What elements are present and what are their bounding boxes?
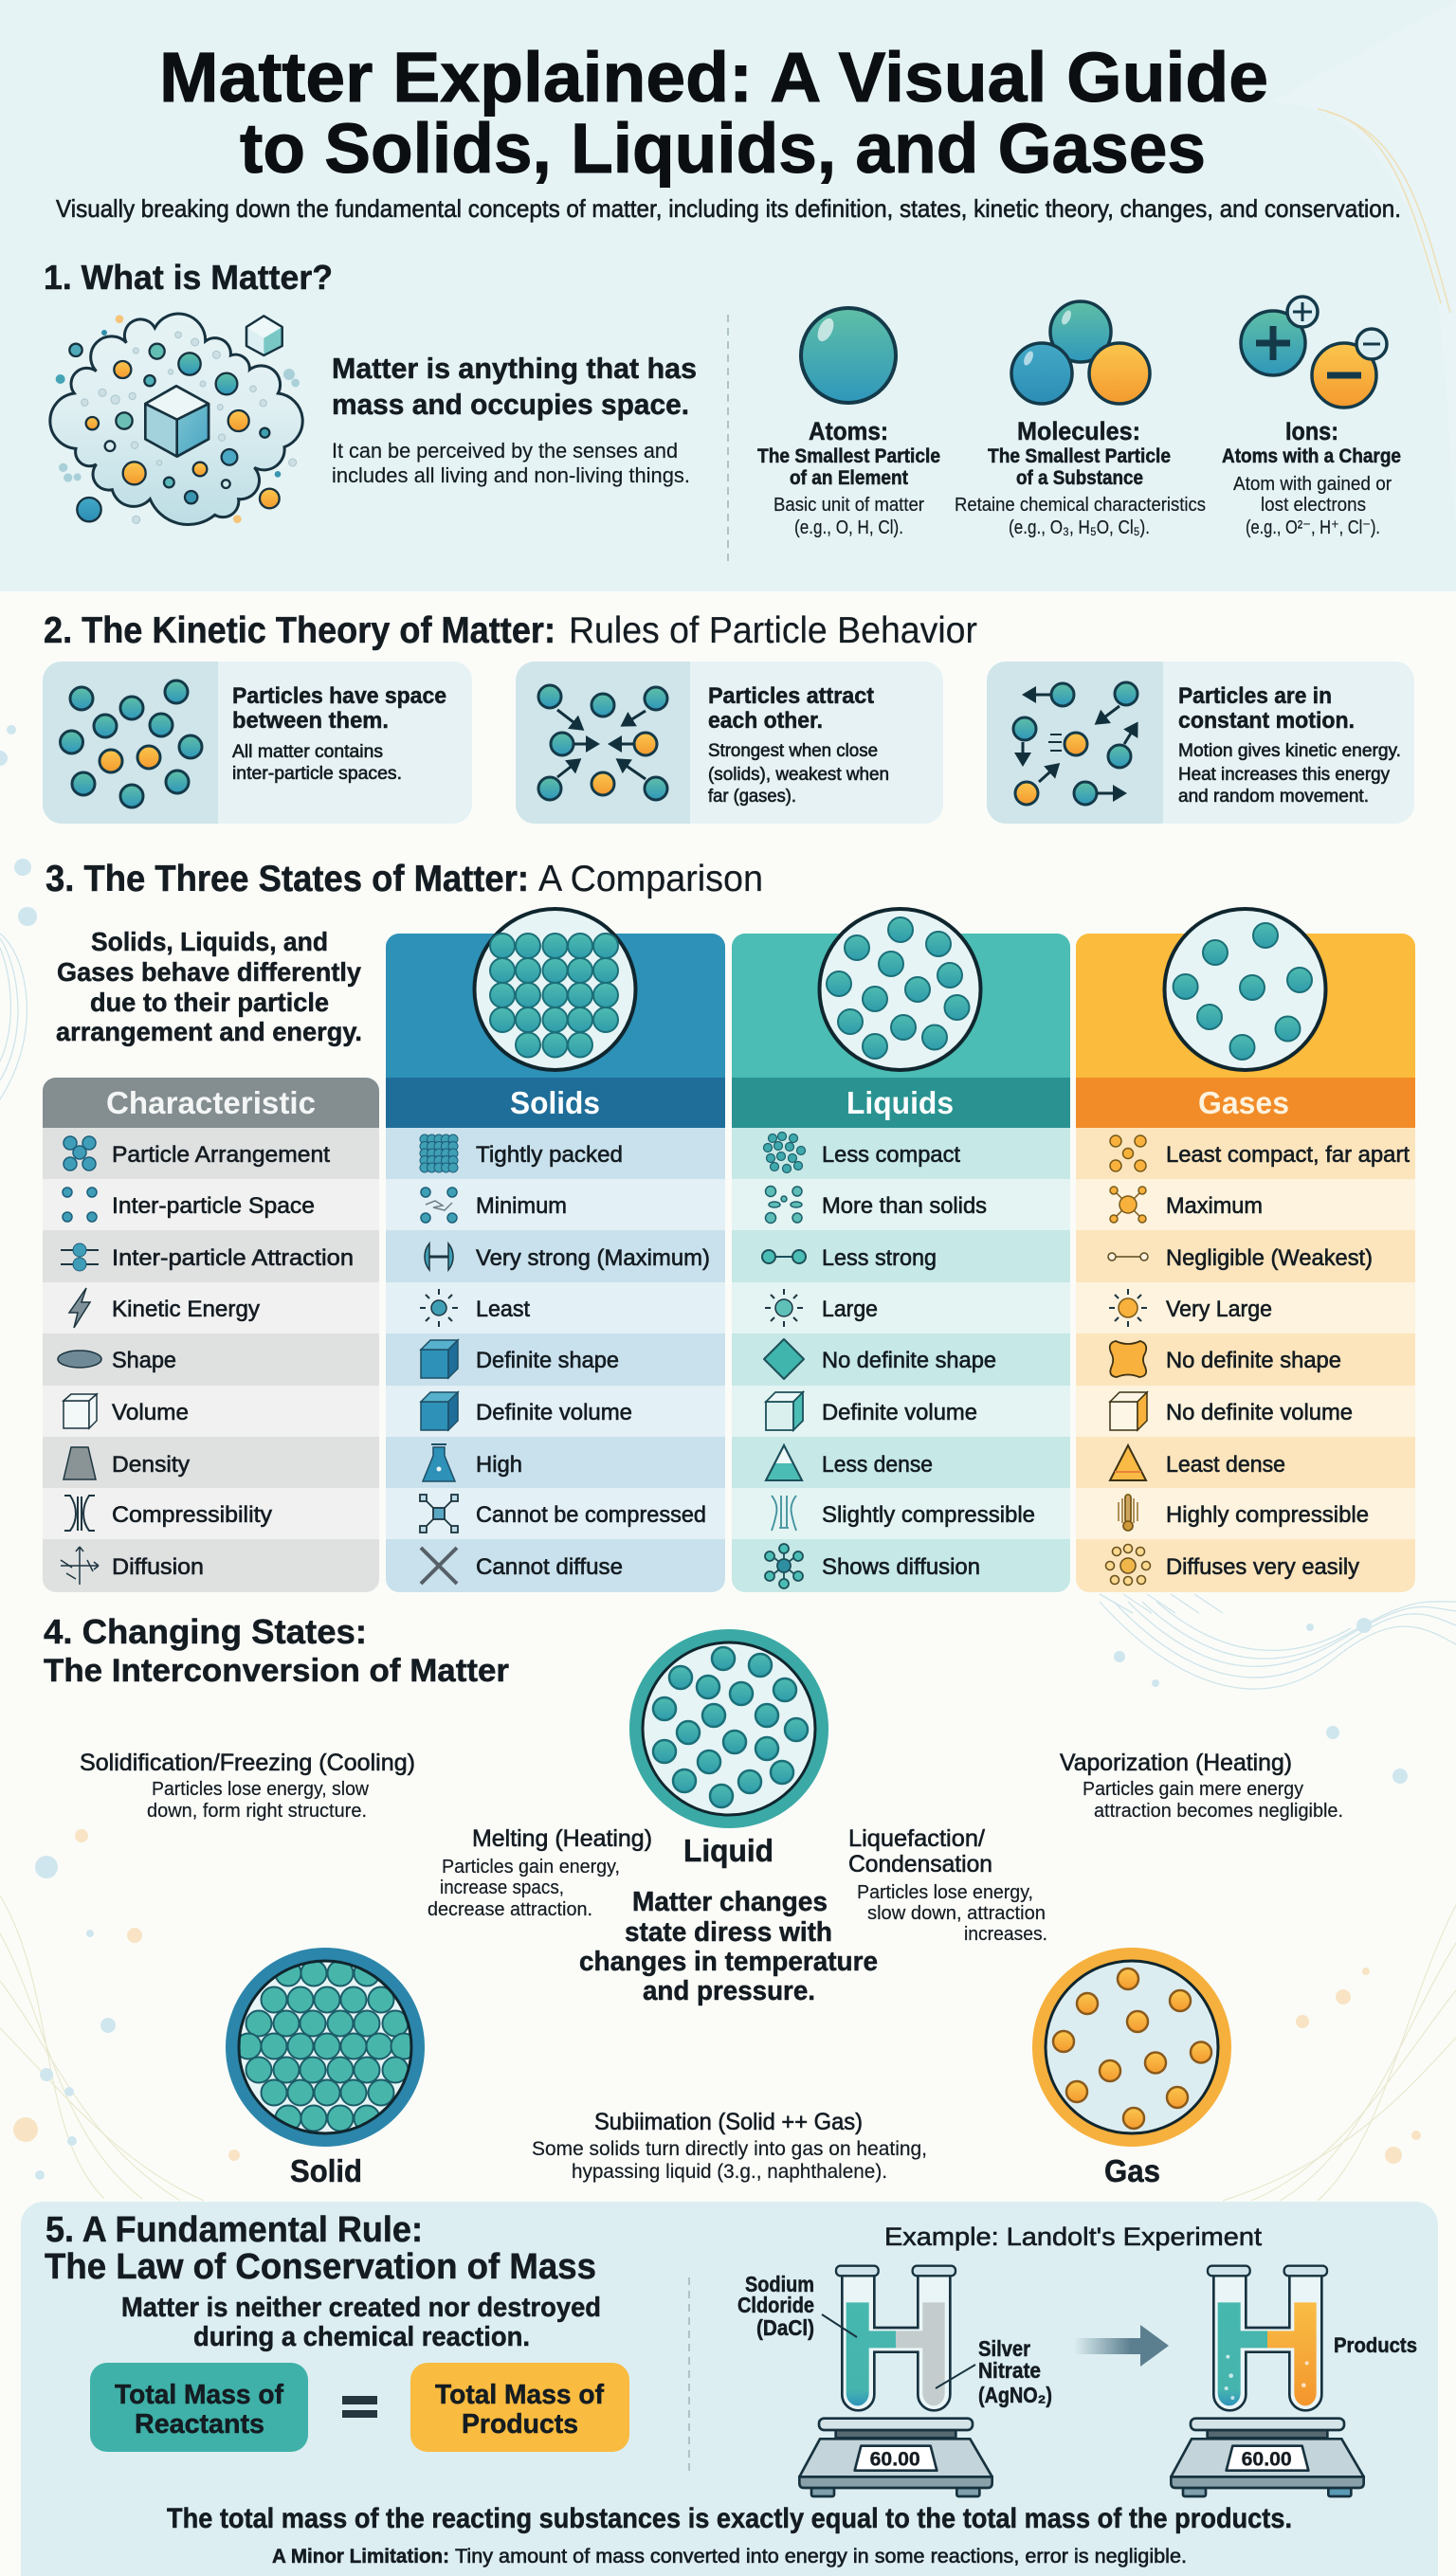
background: decorative dots and waves bbox=[0, 725, 1456, 2201]
card text: Particles have space bbox=[232, 683, 446, 709]
icon: spaced particles bbox=[61, 680, 202, 807]
row: density: Density bbox=[112, 1452, 190, 1478]
labels: reactants: Silver bbox=[978, 2336, 1030, 2361]
ions text: Atom with gained or bbox=[1233, 474, 1392, 495]
row: inter-particle attraction: Inter-particle Attraction bbox=[112, 1245, 354, 1271]
row: tightly packed: Tightly packed bbox=[476, 1142, 623, 1168]
limitation note: Tiny amount of mass converted into energy in some reactions, error is negligible. bbox=[455, 2546, 1187, 2567]
definition text: It can be perceived by the senses and bbox=[332, 439, 678, 463]
icon: less dense bbox=[766, 1445, 802, 1480]
molecules text bbox=[955, 417, 1206, 538]
icon: kinetic energy bbox=[69, 1288, 90, 1328]
label: products: Products bbox=[1334, 2333, 1417, 2357]
heading: section 5: The Law of Conservation of Mass bbox=[45, 2247, 596, 2287]
icon: highly compressible bbox=[1119, 1495, 1138, 1531]
icon: tightly packed bbox=[420, 1134, 458, 1172]
text: melting: decrease attraction. bbox=[428, 1899, 592, 1920]
row: maximum: Maximum bbox=[1166, 1193, 1263, 1219]
heading: section 2 bbox=[44, 610, 977, 651]
icon: moving particles bbox=[1013, 682, 1138, 805]
icon: very strong bbox=[425, 1243, 453, 1270]
icon: scale before reaction: 60.00 bbox=[870, 2449, 920, 2471]
labels: reactants bbox=[737, 2272, 1052, 2407]
row: definite volume: Definite volume bbox=[476, 1400, 632, 1425]
panel: particles have space bbox=[43, 662, 472, 824]
atoms text: The Smallest Particle bbox=[757, 445, 940, 467]
row: definite volume: Definite volume bbox=[822, 1400, 977, 1425]
card text bbox=[708, 683, 889, 807]
definition text: Matter is anything that has bbox=[332, 352, 697, 385]
title bbox=[159, 38, 1268, 188]
labels: reactants: (DaCl) bbox=[756, 2315, 814, 2340]
law statement: Matter is neither created nor destroyed bbox=[121, 2293, 601, 2323]
text: solidification: Particles lose energy, slow bbox=[152, 1779, 370, 1800]
molecules text: (e.g., O₃, H₅O, Cl₅). bbox=[1009, 517, 1150, 538]
intro text: Gases behave differently bbox=[57, 957, 361, 987]
text: liquefaction: Liquefaction/ bbox=[848, 1825, 985, 1852]
row: kinetic energy: Kinetic Energy bbox=[112, 1297, 260, 1322]
icon: diffuses very easily bbox=[1105, 1545, 1151, 1585]
text: liquefaction: Particles lose energy, bbox=[857, 1882, 1033, 1903]
ions text: Ions: bbox=[1285, 417, 1338, 445]
icon: particle arrangement bbox=[64, 1136, 96, 1170]
row: large: Large bbox=[822, 1297, 878, 1322]
section 1 background band bbox=[0, 0, 1456, 591]
icon: maximum space bbox=[1110, 1187, 1146, 1223]
row: least dense: Least dense bbox=[1166, 1452, 1285, 1478]
icon: cannot diffuse bbox=[421, 1548, 457, 1584]
row: highly compressible: Highly compressible bbox=[1166, 1502, 1369, 1528]
box: total mass of reactants: Reactants bbox=[135, 2409, 264, 2440]
icon: large energy bbox=[765, 1289, 803, 1327]
heading: landolt's experiment: Example: Landolt's Experiment bbox=[884, 2222, 1263, 2251]
molecules text: The Smallest Particle bbox=[988, 445, 1171, 467]
icon: slightly compressible bbox=[772, 1496, 796, 1531]
icon: very large energy bbox=[1109, 1289, 1147, 1327]
atoms text: of an Element bbox=[790, 467, 908, 489]
text: vaporization: Particles gain mere energy bbox=[1083, 1779, 1303, 1800]
text: center statement: and pressure. bbox=[643, 1976, 815, 2006]
text: vaporization: Vaporization (Heating) bbox=[1060, 1750, 1292, 1776]
equals sign bbox=[342, 2396, 377, 2418]
card text: (solids), weakest when bbox=[708, 765, 889, 785]
card text bbox=[232, 683, 446, 784]
molecules text: of a Substance bbox=[1016, 467, 1143, 489]
icon: less strong bbox=[762, 1250, 806, 1263]
icon: no definite volume bbox=[1110, 1392, 1147, 1430]
row: diffusion: Diffusion bbox=[112, 1554, 204, 1580]
text: center statement: changes in temperature bbox=[579, 1947, 878, 1977]
panel: characteristic column bbox=[43, 1078, 379, 1592]
title: Matter Explained: A Visual Guide bbox=[159, 38, 1268, 117]
icon: matter cloud bbox=[50, 314, 302, 525]
card text: each other. bbox=[708, 708, 823, 734]
icon: definite shape bbox=[421, 1340, 458, 1378]
icon: atom bbox=[801, 308, 896, 403]
labels: reactants: (AgNO₂) bbox=[978, 2383, 1052, 2407]
text: melting: increase spacs, bbox=[440, 1878, 564, 1898]
panel: section 5 conservation of mass bbox=[21, 2202, 1438, 2576]
row: shape: Shape bbox=[112, 1348, 176, 1373]
intro text: due to their particle bbox=[90, 988, 329, 1017]
text: sublimation: Some solids turn directly into gas on heating, bbox=[532, 2138, 927, 2160]
icon: inter-particle attraction bbox=[61, 1243, 99, 1271]
molecules text: Molecules: bbox=[1017, 417, 1140, 445]
ions text bbox=[1222, 417, 1401, 538]
row: no definite shape: No definite shape bbox=[1166, 1348, 1341, 1373]
intro text: arrangement and energy. bbox=[56, 1017, 362, 1046]
text: liquefaction: increases. bbox=[964, 1924, 1047, 1945]
atoms text: (e.g., O, H, Cl). bbox=[794, 517, 903, 538]
label: solid: Solid bbox=[290, 2153, 362, 2188]
title: to Solids, Liquids, and Gases bbox=[240, 109, 1206, 188]
definition text: includes all living and non-living things. bbox=[332, 463, 690, 487]
row: least: Least bbox=[476, 1297, 530, 1322]
ions text: (e.g., O²⁻, H⁺, Cl⁻). bbox=[1246, 517, 1380, 538]
icon: no definite shape bbox=[764, 1339, 804, 1379]
panel: particles in motion bbox=[987, 662, 1414, 824]
icon: no definite shape bbox=[1110, 1341, 1146, 1377]
row: less compact: Less compact bbox=[822, 1142, 960, 1168]
header: liquids: Liquids bbox=[846, 1085, 954, 1120]
panel: liquids column bbox=[732, 909, 1070, 1592]
icon: shows diffusion bbox=[765, 1544, 803, 1588]
card text: constant motion. bbox=[1178, 708, 1355, 734]
card text: Strongest when close bbox=[708, 741, 878, 761]
row: cannot diffuse: Cannot diffuse bbox=[476, 1554, 623, 1580]
icon: scale before reaction bbox=[799, 2419, 992, 2496]
box: total mass of reactants bbox=[90, 2363, 308, 2452]
section 2: kinetic theory bbox=[43, 610, 1414, 824]
icon: molecule bbox=[1011, 301, 1150, 404]
row: volume: Volume bbox=[112, 1400, 189, 1425]
row: inter-particle space: Inter-particle Space bbox=[112, 1193, 315, 1219]
icon: shape bbox=[58, 1351, 101, 1368]
row: minimum: Minimum bbox=[476, 1193, 567, 1219]
card text: inter-particle spaces. bbox=[232, 764, 402, 784]
text: liquefaction: slow down, attraction bbox=[867, 1903, 1046, 1924]
icon: definite volume bbox=[766, 1392, 803, 1430]
ions text: Atoms with a Charge bbox=[1222, 445, 1401, 467]
card text: Heat increases this energy bbox=[1178, 765, 1390, 785]
text: vaporization bbox=[1060, 1750, 1343, 1822]
labels: reactants: Cldoride bbox=[737, 2293, 814, 2317]
text: solidification bbox=[80, 1750, 415, 1822]
row: particle arrangement: Particle Arrangement bbox=[112, 1142, 330, 1168]
card text: and random movement. bbox=[1178, 787, 1369, 807]
icon: cannot be compressed bbox=[420, 1495, 458, 1533]
header: gases: Gases bbox=[1198, 1085, 1289, 1120]
icon: ions bbox=[1241, 297, 1387, 408]
card text: between them. bbox=[232, 708, 389, 734]
law statement: during a chemical reaction. bbox=[193, 2322, 530, 2352]
icon: more than solids bbox=[766, 1187, 802, 1223]
text: melting: Melting (Heating) bbox=[472, 1825, 652, 1852]
labels: reactants: Nitrate bbox=[978, 2358, 1041, 2383]
panel: gases column bbox=[1076, 909, 1415, 1592]
label: liquid: Liquid bbox=[683, 1833, 774, 1868]
row: no definite shape: No definite shape bbox=[822, 1348, 996, 1373]
row: less strong: Less strong bbox=[822, 1245, 937, 1271]
text: melting: Particles gain energy, bbox=[442, 1857, 620, 1878]
text: sublimation bbox=[532, 2109, 927, 2183]
icon: least energy bbox=[420, 1289, 458, 1327]
row: very large: Very Large bbox=[1166, 1297, 1272, 1322]
icon: high density bbox=[423, 1444, 455, 1481]
heading: section 4: The Interconversion of Matter bbox=[44, 1653, 509, 1689]
card text bbox=[1178, 683, 1401, 807]
intro text: Solids, Liquids, and bbox=[91, 927, 328, 956]
icon: inter-particle space bbox=[63, 1188, 97, 1222]
arrow: reaction bbox=[1074, 2325, 1169, 2367]
icon: scale after reaction bbox=[1171, 2419, 1364, 2496]
box: total mass of products: Total Mass of bbox=[435, 2380, 604, 2410]
molecules text: Retaine chemical characteristics bbox=[955, 495, 1206, 516]
icon: least compact bbox=[1110, 1135, 1146, 1171]
heading: section 2: Rules of Particle Behavior bbox=[569, 610, 977, 651]
text: solidification: down, form right structure. bbox=[147, 1801, 367, 1822]
box: total mass of reactants: Total Mass of bbox=[115, 2380, 283, 2410]
icon: density bbox=[64, 1447, 96, 1479]
particle diagram: gas state bbox=[1039, 1954, 1225, 2140]
row: very strong: Very strong (Maximum) bbox=[476, 1245, 710, 1271]
icon: negligible attraction bbox=[1108, 1253, 1148, 1261]
subtitle: Visually breaking down the fundamental concepts of matter, including its definition, states, kinetic theory, changes, and conservation. bbox=[56, 194, 1401, 223]
heading: section 3: A Comparison bbox=[538, 859, 763, 899]
icon: attracting particles bbox=[538, 685, 667, 800]
panel: solids column bbox=[386, 909, 725, 1592]
icon: less compact bbox=[764, 1132, 806, 1173]
heading: section 4: 4. Changing States: bbox=[44, 1612, 367, 1651]
text: center statement: state diress with bbox=[625, 1917, 832, 1948]
icon: H-tube before reaction bbox=[836, 2266, 956, 2410]
row: shows diffusion: Shows diffusion bbox=[822, 1554, 980, 1580]
text: liquefaction: Condensation bbox=[848, 1851, 992, 1878]
icon: volume bbox=[64, 1394, 97, 1428]
text: solidification: Solidification/Freezing (Cooling) bbox=[80, 1750, 415, 1776]
row: compressibility: Compressibility bbox=[112, 1502, 272, 1528]
heading: section 4 bbox=[44, 1612, 509, 1689]
icon: scale after reaction: 60.00 bbox=[1242, 2449, 1292, 2471]
text: sublimation: Subiimation (Solid ++ Gas) bbox=[594, 2109, 863, 2135]
atoms text bbox=[757, 417, 940, 538]
section 1: what is matter bbox=[44, 258, 1401, 567]
ions text: lost electrons bbox=[1261, 495, 1366, 516]
definition text bbox=[332, 352, 697, 487]
row: less dense: Less dense bbox=[822, 1452, 933, 1478]
icon: minimum space bbox=[421, 1188, 457, 1223]
atoms text: Atoms: bbox=[809, 417, 888, 445]
row: definite shape: Definite shape bbox=[476, 1348, 619, 1373]
icon: diffusion bbox=[61, 1547, 99, 1585]
row: diffuses very easily: Diffuses very easily bbox=[1166, 1554, 1359, 1580]
labels: reactants: Sodium bbox=[745, 2272, 814, 2296]
row: no definite volume: No definite volume bbox=[1166, 1400, 1353, 1425]
heading: section 3: 3. The Three States of Matter: bbox=[46, 859, 529, 899]
row: negligible: Negligible (Weakest) bbox=[1166, 1245, 1373, 1271]
text: vaporization: attraction becomes negligible. bbox=[1094, 1801, 1343, 1822]
text: sublimation: hypassing liquid (3.g., naphthalene). bbox=[572, 2161, 887, 2183]
card text: Motion gives kinetic energy. bbox=[1178, 741, 1401, 761]
heading: section 5 bbox=[45, 2210, 596, 2287]
row: high: High bbox=[476, 1452, 522, 1478]
row: slightly compressible: Slightly compressible bbox=[822, 1502, 1035, 1528]
row: cannot be compressed: Cannot be compressed bbox=[476, 1502, 706, 1528]
heading: section 5: 5. A Fundamental Rule: bbox=[46, 2210, 423, 2250]
icon: compressibility bbox=[64, 1496, 95, 1531]
row: more than solids: More than solids bbox=[822, 1193, 987, 1219]
limitation note: A Minor Limitation: bbox=[272, 2546, 449, 2567]
card text: far (gases). bbox=[708, 787, 796, 807]
card text: Particles attract bbox=[708, 683, 874, 709]
text: center statement: Matter changes bbox=[632, 1887, 828, 1917]
particle diagram: solid state bbox=[232, 1954, 418, 2140]
intro text bbox=[56, 927, 362, 1046]
text: melting bbox=[428, 1825, 652, 1920]
section 3: three states comparison bbox=[43, 859, 1415, 1592]
icon: H-tube after reaction bbox=[1208, 2266, 1327, 2410]
box: total mass of products bbox=[410, 2363, 629, 2452]
text: center statement bbox=[579, 1887, 878, 2006]
particle diagram: solid bbox=[474, 909, 635, 1070]
heading: section 1: 1. What is Matter? bbox=[44, 258, 333, 297]
panel: particles attract bbox=[516, 662, 943, 824]
icon: least dense bbox=[1110, 1445, 1146, 1480]
definition text: mass and occupies space. bbox=[332, 388, 689, 421]
atoms text: Basic unit of matter bbox=[774, 495, 924, 516]
conclusion text: The total mass of the reacting substances is exactly equal to the total mass of the products. bbox=[167, 2503, 1292, 2534]
particle diagram: liquid state bbox=[636, 1636, 822, 1822]
box: total mass of products: Products bbox=[462, 2409, 578, 2440]
section 4: changing states bbox=[44, 1612, 1343, 2188]
law statement bbox=[121, 2293, 601, 2352]
card text: Particles are in bbox=[1178, 683, 1332, 709]
icon: definite volume bbox=[421, 1392, 458, 1430]
particle diagram: liquid bbox=[819, 909, 980, 1070]
header: solids: Solids bbox=[510, 1085, 600, 1120]
card text: All matter contains bbox=[232, 742, 383, 762]
header: characteristic: Characteristic bbox=[106, 1085, 316, 1120]
row: least compact: Least compact, far apart bbox=[1166, 1142, 1410, 1168]
particle diagram: gas bbox=[1164, 909, 1325, 1070]
text: liquefaction bbox=[848, 1825, 1047, 1945]
heading: section 2: 2. The Kinetic Theory of Matter: bbox=[44, 610, 555, 651]
label: gas: Gas bbox=[1104, 2153, 1160, 2188]
